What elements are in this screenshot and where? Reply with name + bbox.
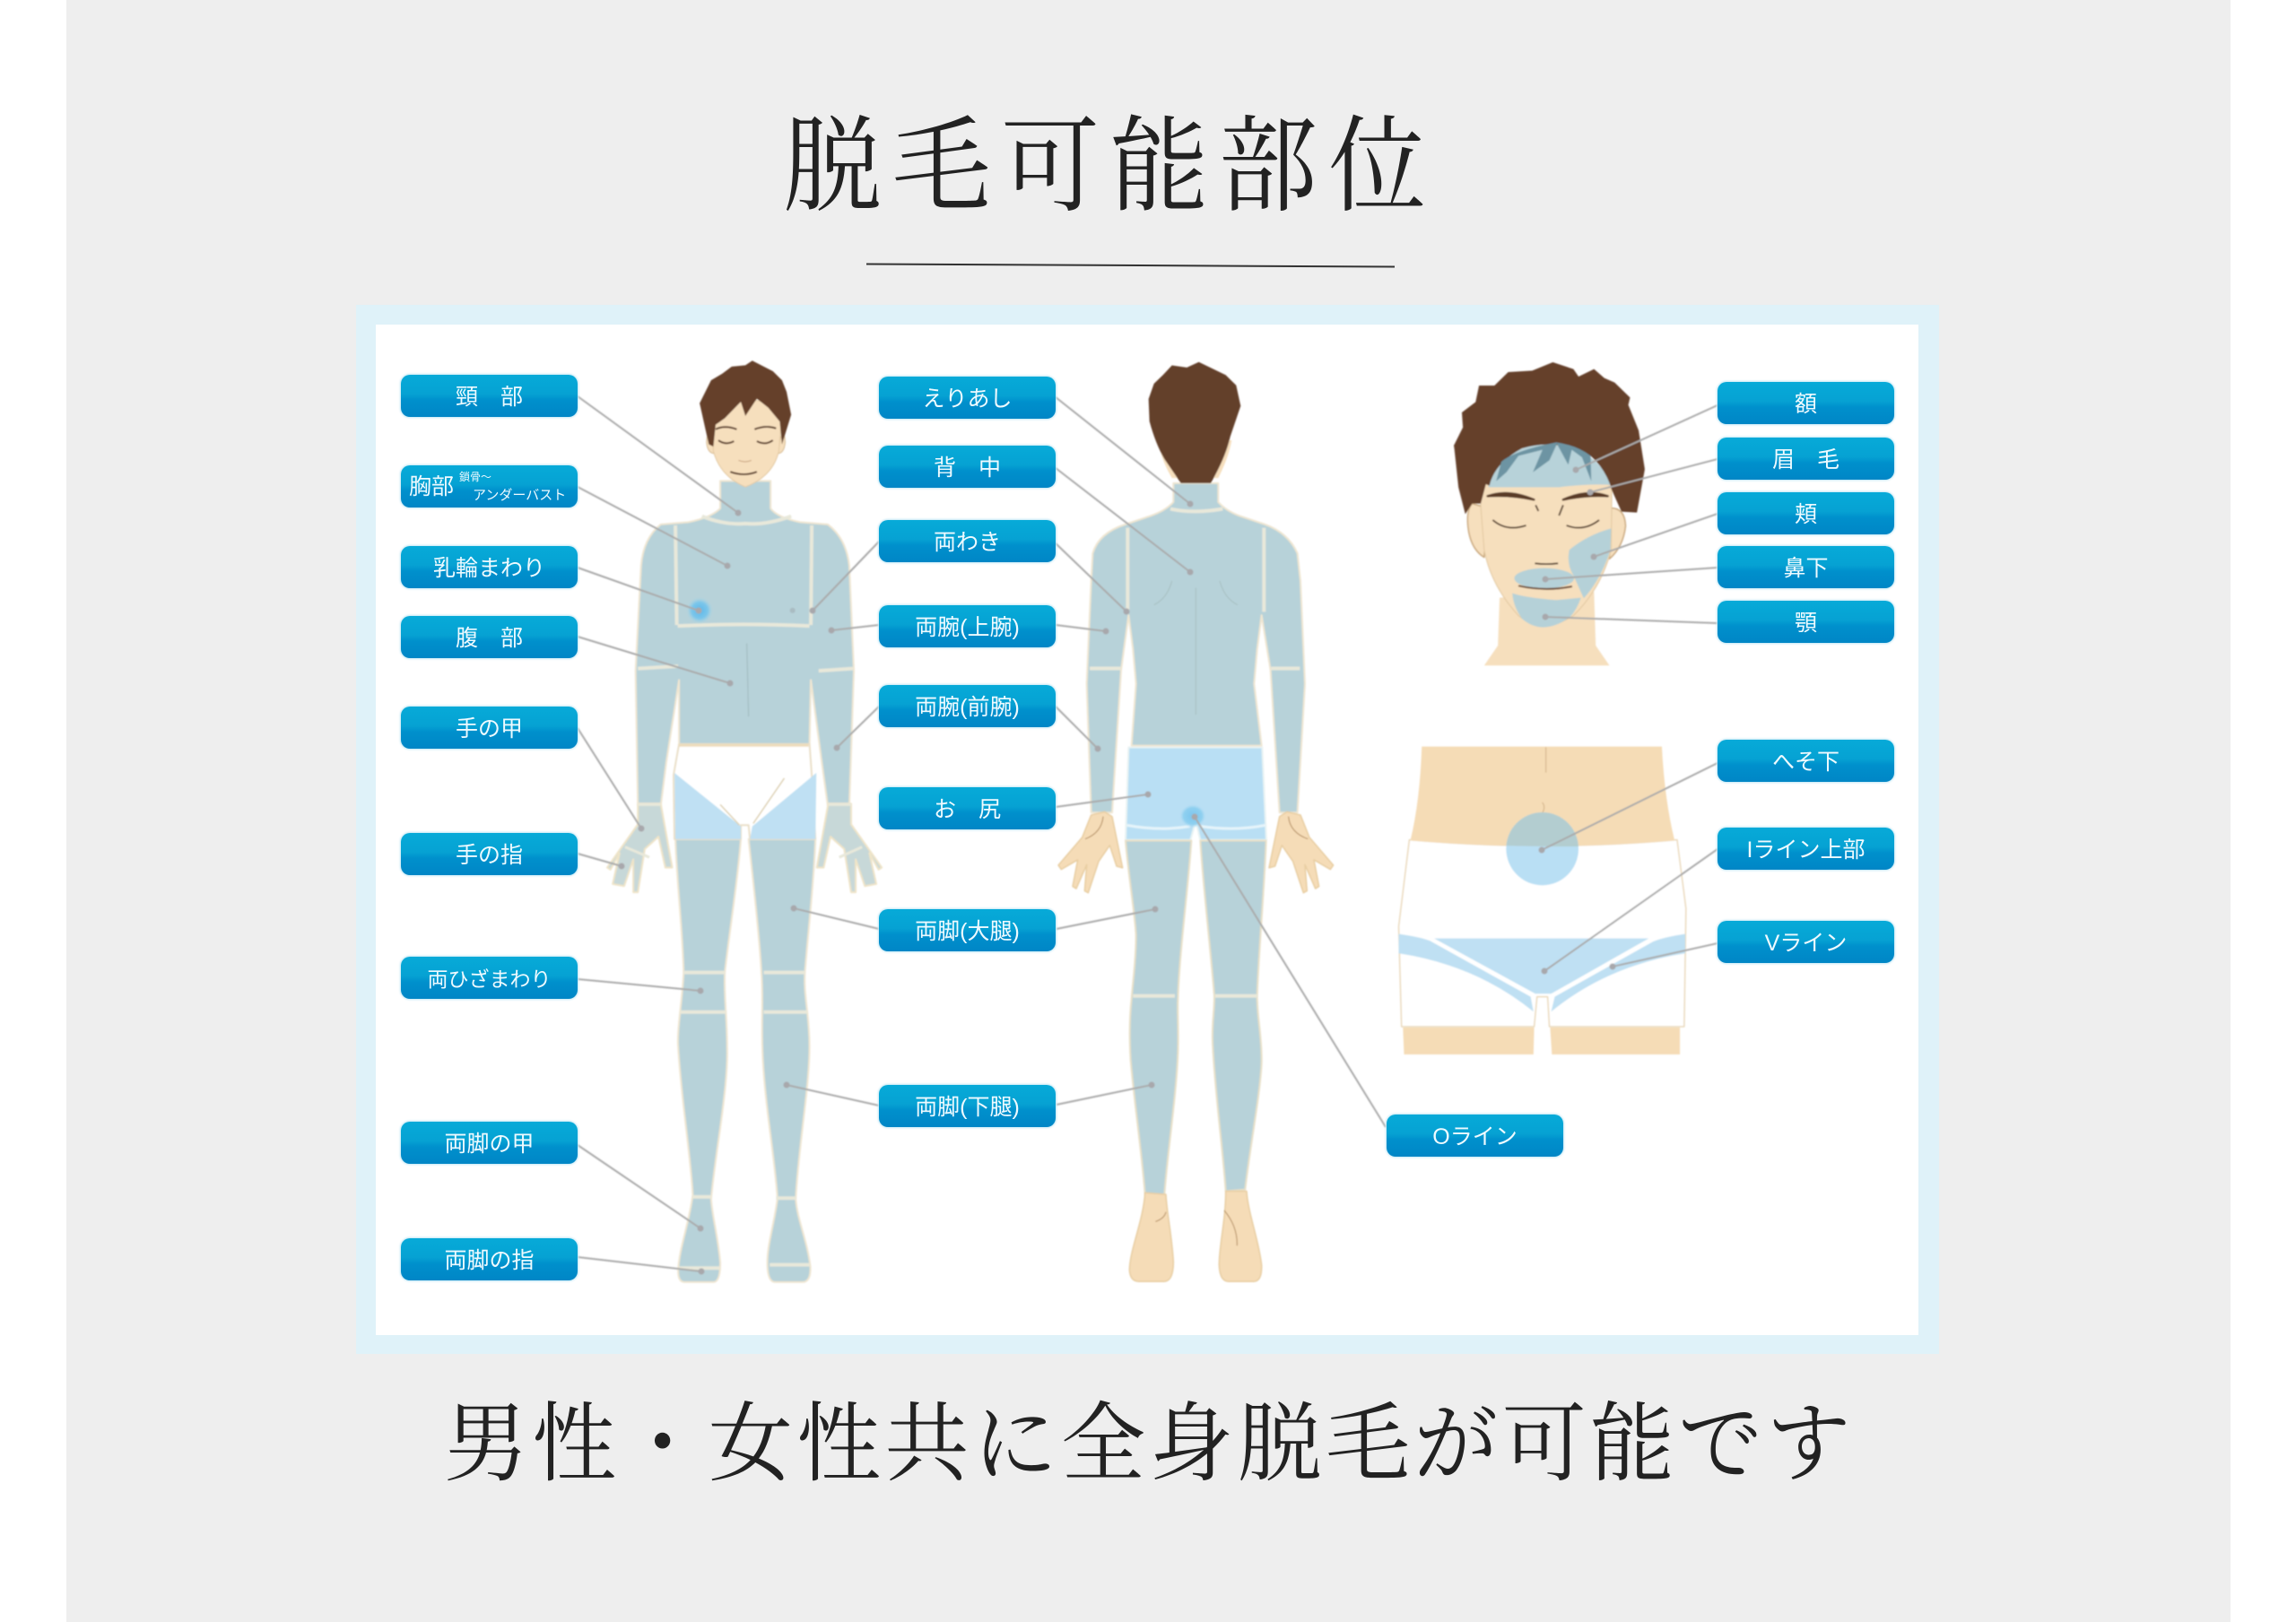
- label: 胸部: 鎖骨〜: [459, 471, 491, 483]
- label: Oライン: [1387, 1115, 1563, 1157]
- label: 両腕(上腕): 両腕(上腕): [915, 615, 1020, 640]
- label: 顎: [1718, 601, 1894, 643]
- chin zone: [1512, 594, 1581, 628]
- under-nose zone: [1514, 568, 1574, 588]
- back hair: [1149, 362, 1240, 483]
- ears: [1467, 504, 1625, 559]
- label: 頸部: 頸 部: [456, 385, 523, 410]
- label: 両脚(大腿): 両脚(大腿): [915, 919, 1020, 944]
- front hands: [607, 803, 882, 892]
- label: 両ひざまわり: 両ひざまわり: [427, 967, 551, 991]
- label: 両脚(下腿): 両脚(下腿): [915, 1095, 1020, 1120]
- label: 両脚(下腿): [879, 1085, 1056, 1127]
- label: えりあし: [879, 377, 1056, 419]
- label: 額: [1718, 382, 1894, 424]
- label: 両脚の指: 両脚の指: [444, 1248, 535, 1273]
- label: 眉毛: [1718, 438, 1894, 480]
- V line zone: [1399, 934, 1685, 1011]
- label: 手の甲: 手の甲: [456, 716, 523, 742]
- forehead zone: [1488, 445, 1611, 487]
- eyebrows: [1488, 493, 1608, 499]
- label: 腹部: [401, 616, 578, 658]
- panel: body map: [356, 305, 1939, 1354]
- thighs: [1403, 1028, 1680, 1054]
- label: 背中: 背 中: [934, 455, 1001, 481]
- label: 手の指: 手の指: [456, 843, 523, 868]
- title: 脱毛可能部位: [783, 109, 1437, 225]
- label: 両腕(上腕): [879, 605, 1056, 647]
- label: へそ下: へそ下: [1772, 750, 1839, 775]
- leader dots: [619, 466, 1616, 1275]
- label: 両脚の指: [401, 1238, 578, 1280]
- label: 両脚の甲: 両脚の甲: [444, 1132, 535, 1157]
- shorts: [1399, 840, 1686, 1027]
- hair: [1454, 362, 1645, 514]
- label: 乳輪まわり: 乳輪まわり: [433, 556, 545, 581]
- label: お尻: [879, 787, 1056, 829]
- label: 頬: [1718, 492, 1894, 534]
- leader lines: [578, 396, 1718, 1271]
- hips close-up: [1399, 747, 1686, 1054]
- back upper body: [1087, 362, 1305, 840]
- bottom caption: 男性・女性共に全身脱毛が可能です: [444, 1397, 1855, 1493]
- label: 両腕(前腕): 両腕(前腕): [915, 695, 1020, 720]
- label: 顎: 顎: [1795, 611, 1817, 636]
- label: 両ひざまわり: [401, 957, 578, 999]
- label: お尻: お 尻: [934, 797, 1001, 822]
- label: 両腕(前腕): [879, 685, 1056, 727]
- label: 胸部: アンダーバスト: [473, 488, 566, 503]
- label: 頸部: [401, 375, 578, 417]
- title underline: [866, 263, 1395, 268]
- label: えりあし: えりあし: [922, 386, 1012, 412]
- under-navel zone: [1506, 812, 1578, 885]
- label: 鼻下: 鼻下: [1783, 556, 1828, 581]
- back legs, hands and feet: [1058, 811, 1334, 1281]
- waist skin: [1411, 747, 1674, 846]
- face skin: [1479, 442, 1612, 625]
- label: Vライン: Vライン: [1765, 931, 1847, 956]
- label: 頬: 頬: [1795, 502, 1817, 527]
- label: 両わき: 両わき: [934, 530, 1001, 555]
- back figure: [1058, 362, 1334, 1281]
- label: 背中: [879, 446, 1056, 488]
- label: 手の指: [401, 833, 578, 875]
- label: へそ下: [1718, 740, 1894, 782]
- front figure: [607, 360, 882, 1282]
- label: 胸部: 胸部: [409, 474, 454, 499]
- label: Iライン上部: [1718, 828, 1894, 870]
- label: Iライン上部: Iライン上部: [1747, 837, 1865, 863]
- neck: [1484, 592, 1609, 665]
- label: Oライン: Oライン: [1432, 1124, 1518, 1149]
- front head: [700, 360, 791, 487]
- eyes and nose: [1492, 505, 1599, 564]
- label: Vライン: [1718, 921, 1894, 963]
- label: 腹部: 腹 部: [456, 626, 523, 651]
- label: 手の甲: [401, 707, 578, 749]
- label: 眉毛: 眉 毛: [1772, 447, 1839, 473]
- label: 両わき: [879, 520, 1056, 562]
- cheek zone: [1569, 528, 1611, 598]
- front upper body: [636, 360, 854, 806]
- artwork group: [578, 360, 1718, 1282]
- label: 額: 額: [1795, 392, 1817, 417]
- face close-up: [1454, 362, 1645, 665]
- front underwear and legs: [607, 744, 882, 1282]
- mouth: [1518, 585, 1572, 589]
- label: 両脚(大腿): [879, 909, 1056, 951]
- back shorts: [1126, 747, 1266, 840]
- label: 胸部: [401, 465, 578, 507]
- label: 鼻下: [1718, 546, 1894, 588]
- label: 両脚の甲: [401, 1122, 578, 1164]
- label: 乳輪まわり: [401, 546, 578, 588]
- body illustrations and leader lines: [578, 360, 1718, 1284]
